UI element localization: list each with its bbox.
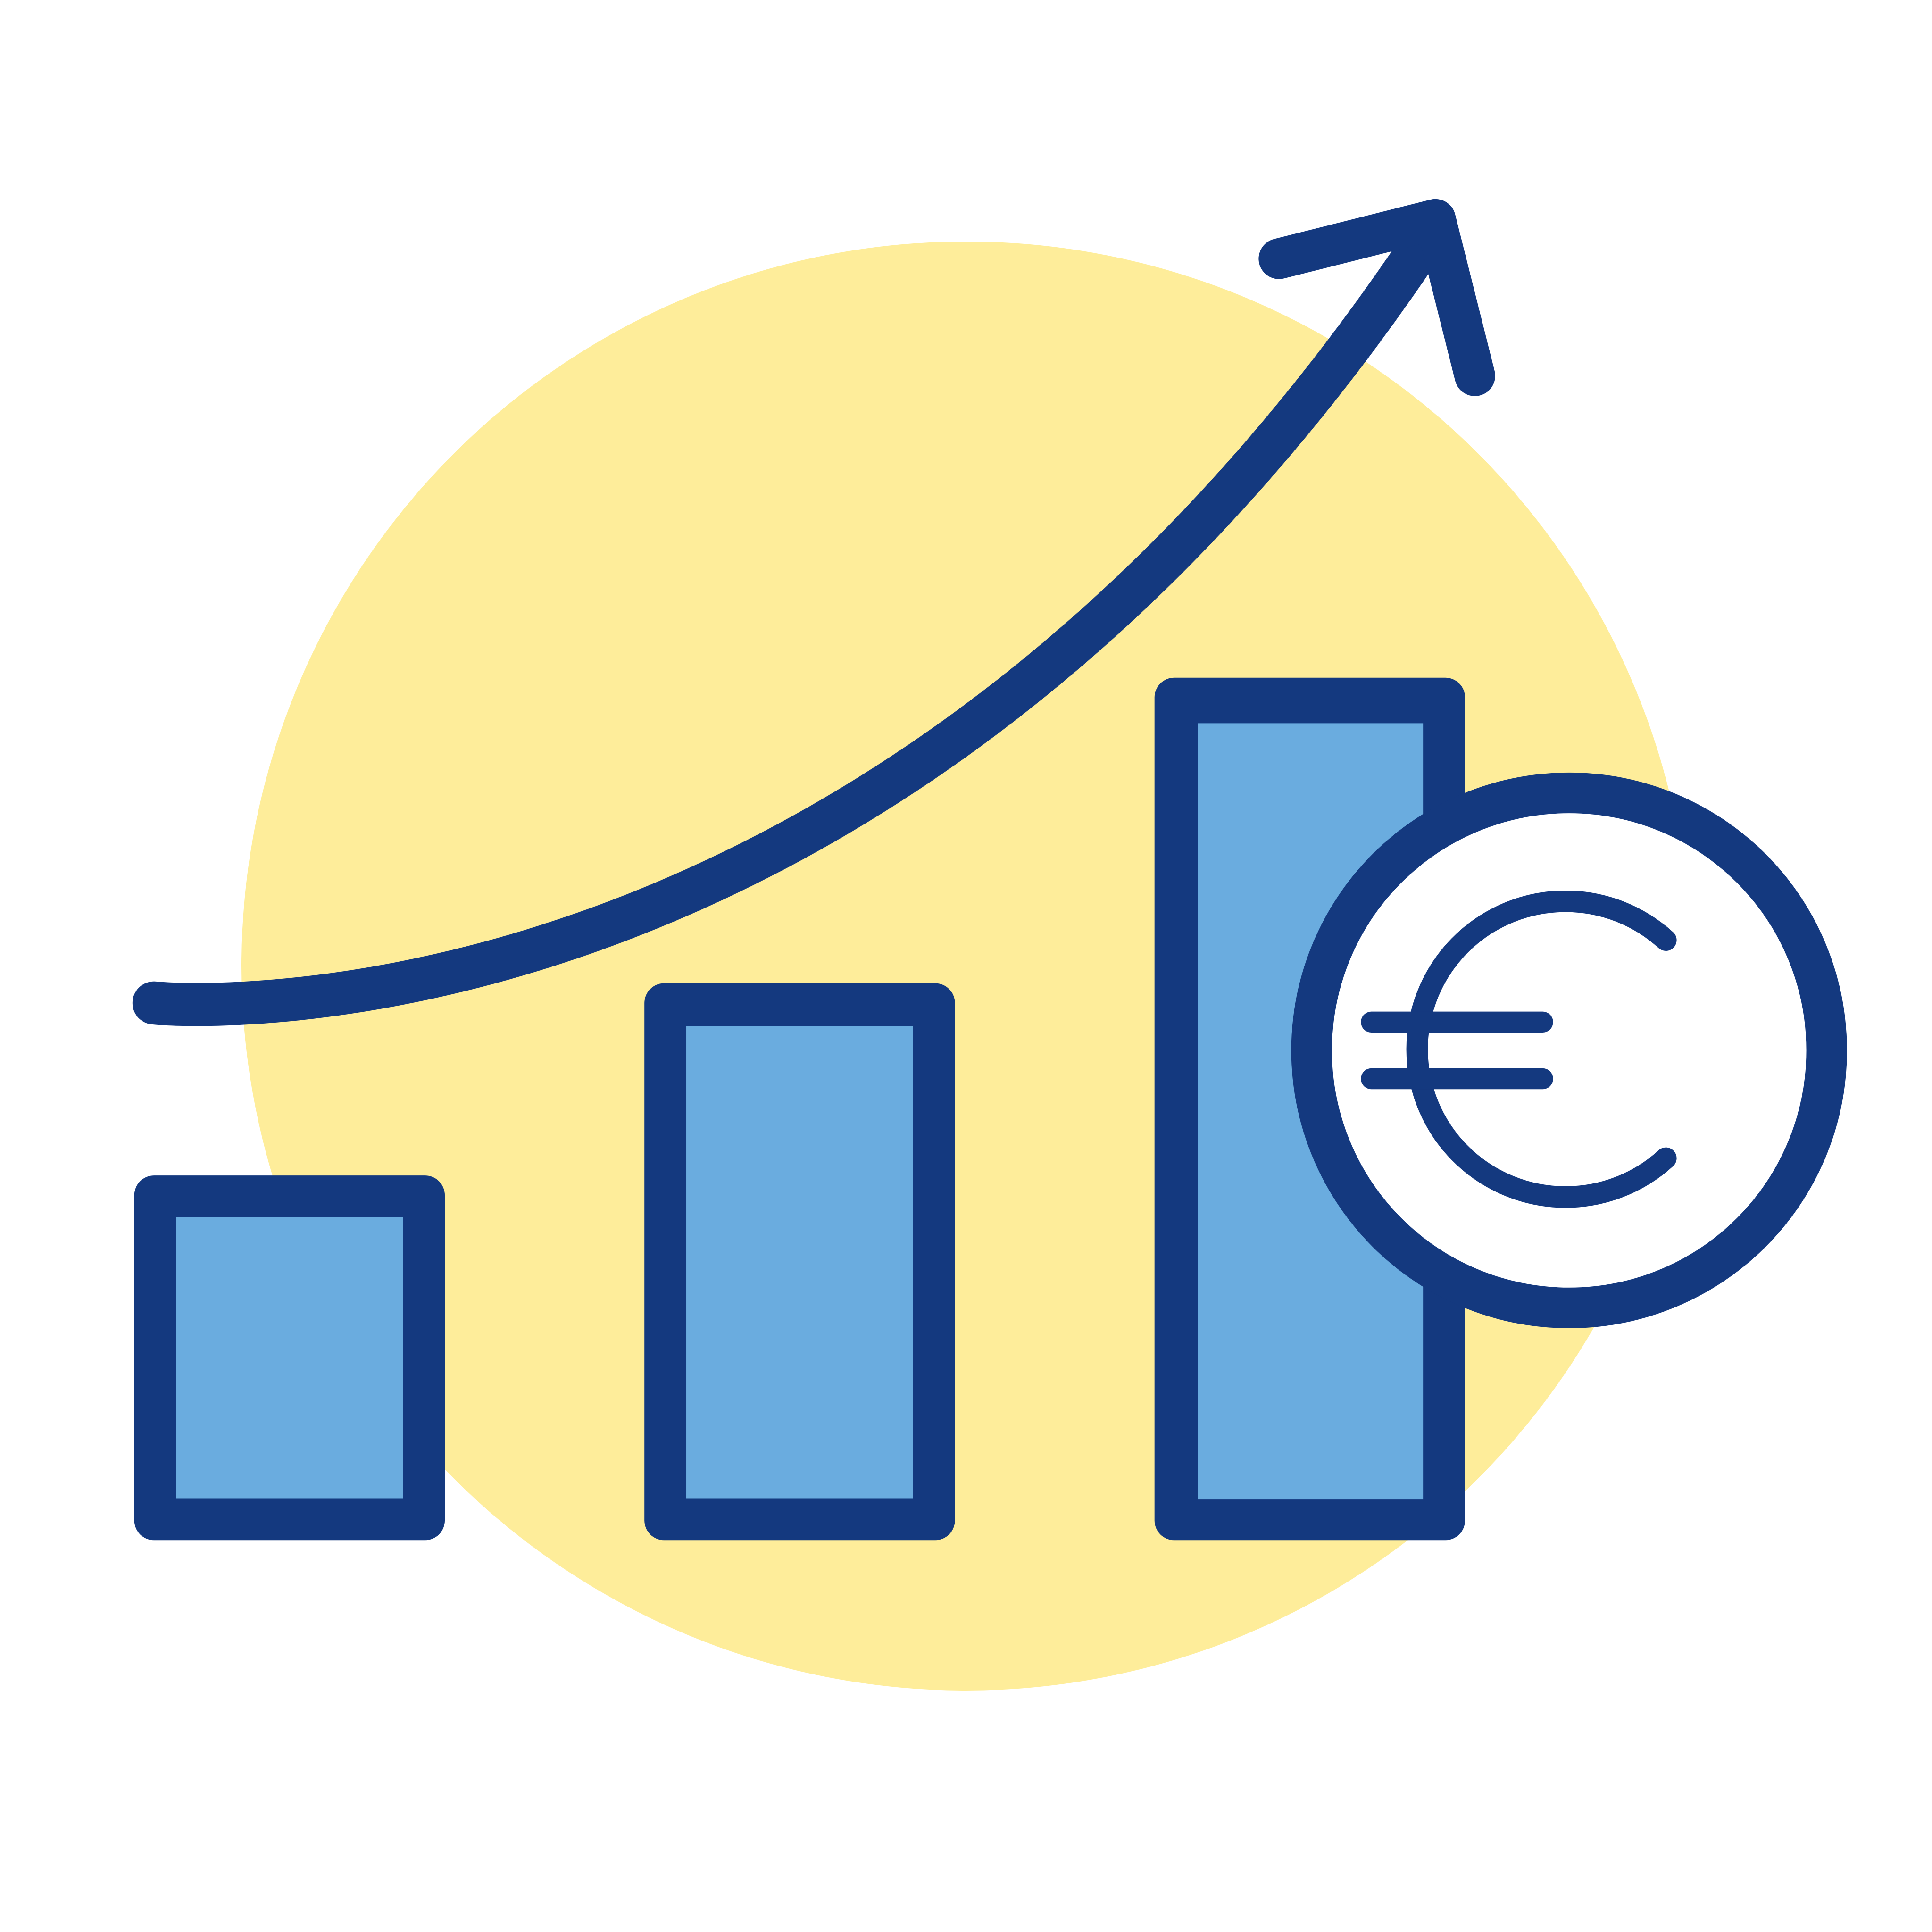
euro arc [1417,901,1666,1197]
growth arrow [154,219,1475,1005]
bar 2: medium [644,983,955,1540]
bar 3: tall [1155,678,1465,1540]
euro lower bar [1371,1075,1543,1083]
euro coin [1312,793,1827,1308]
arrow head [1279,219,1475,376]
euro symbol [1371,901,1666,1197]
yellow background circle [242,242,1690,1690]
arrow curve [154,234,1429,1005]
coin disc [1312,793,1827,1308]
bar 1: small [134,1175,445,1540]
euro upper bar [1371,1018,1543,1026]
